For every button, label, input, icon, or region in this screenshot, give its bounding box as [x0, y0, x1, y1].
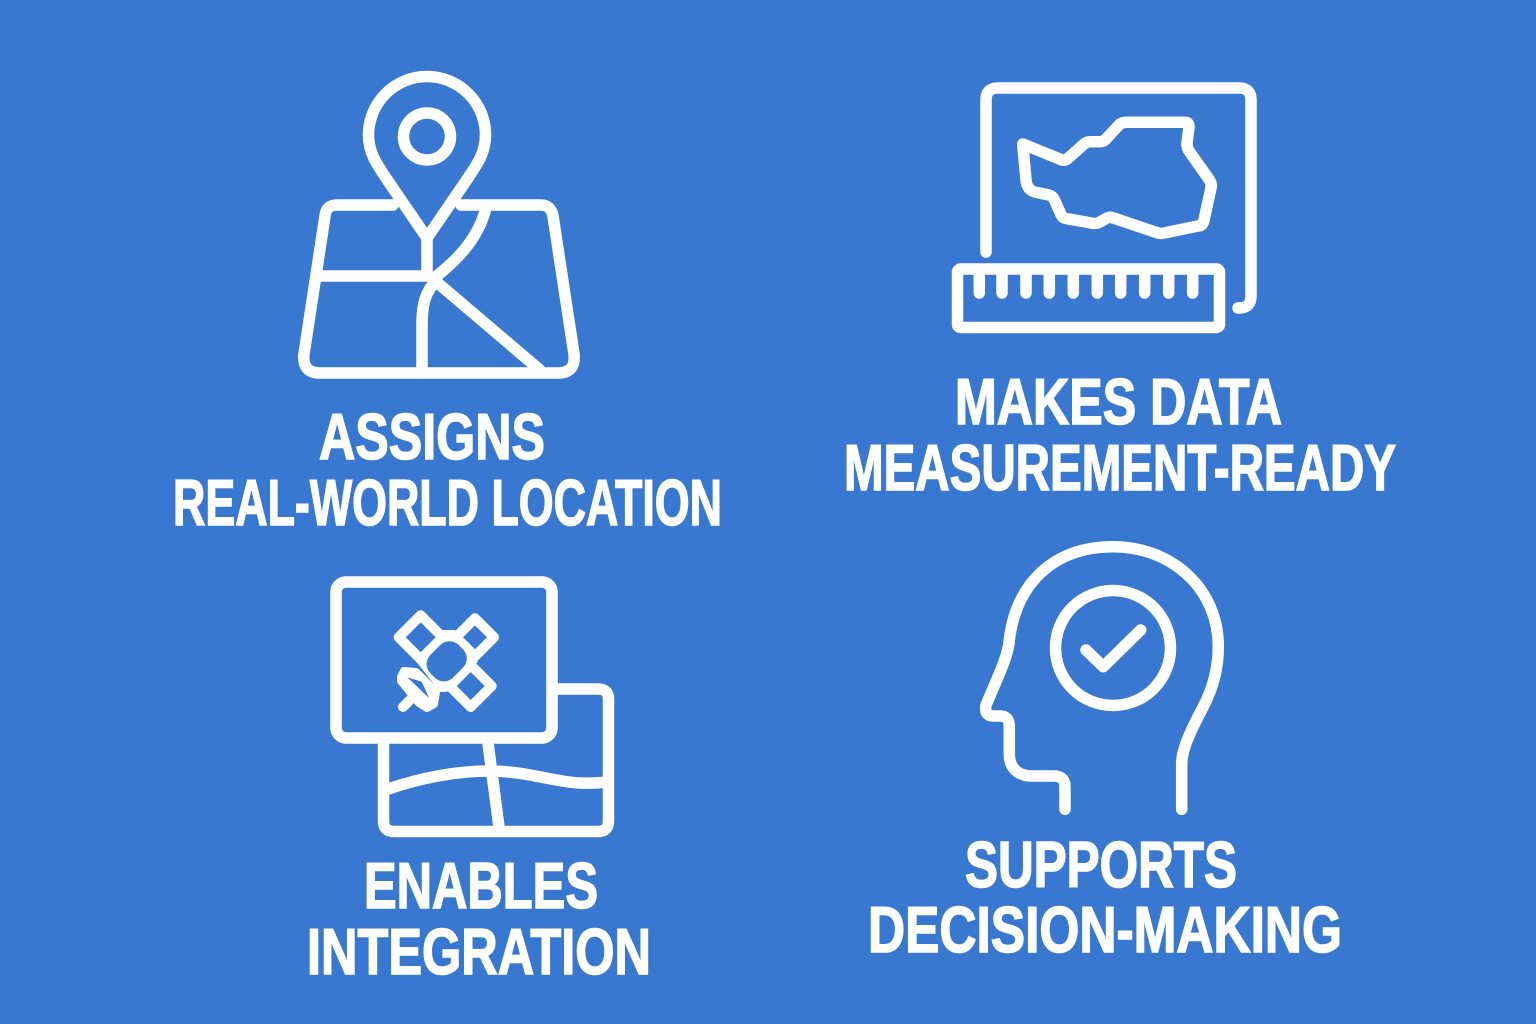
icon: head with check mark — [986, 547, 1218, 809]
heading: supports decision-making — [868, 828, 1342, 966]
heading: supports decision-making: DECISION-MAKING — [868, 893, 1342, 966]
heading: assigns real-world location — [173, 400, 722, 539]
heading: enables integration — [307, 849, 651, 988]
satellite glyph — [399, 615, 494, 708]
back map layer — [384, 689, 608, 832]
panel: makes data measurement-ready — [844, 88, 1396, 504]
heading: assigns real-world location: REAL-WORLD LOCATION — [173, 466, 722, 539]
panel: assigns real-world location — [173, 77, 722, 539]
panel: enables integration — [307, 582, 651, 988]
icon: map frame with ruler — [958, 88, 1251, 328]
icon: map with location pin — [304, 77, 574, 373]
heading: assigns real-world location: ASSIGNS — [319, 400, 545, 473]
panel: supports decision-making — [868, 547, 1342, 966]
heading: enables integration: ENABLES — [364, 849, 598, 922]
front panel — [336, 582, 552, 738]
heading: makes data measurement-ready — [844, 365, 1396, 504]
heading: enables integration: INTEGRATION — [307, 915, 651, 988]
icon: overlapping layers with satellite — [336, 582, 608, 832]
heading: makes data measurement-ready: MAKES DATA — [955, 365, 1282, 438]
heading: supports decision-making: SUPPORTS — [965, 828, 1237, 901]
